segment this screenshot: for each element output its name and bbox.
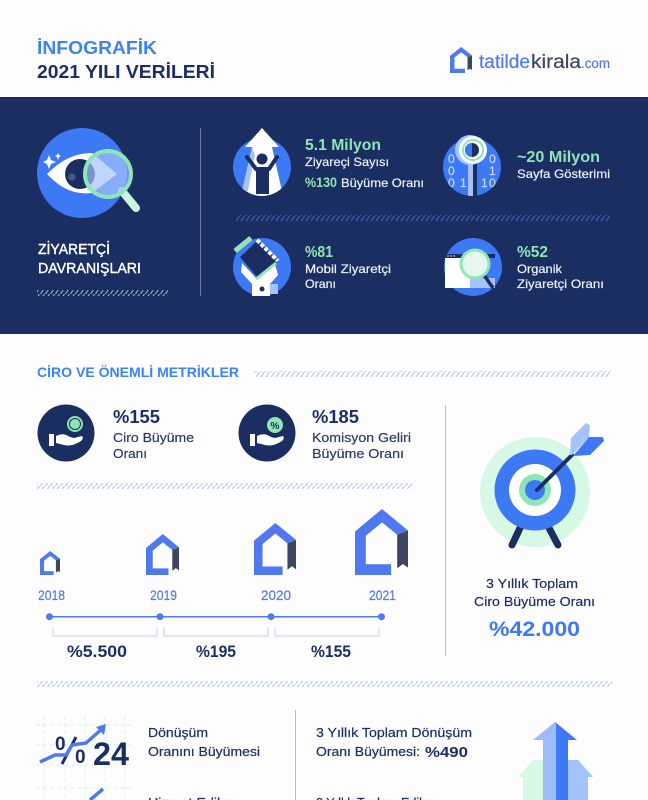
logo: tatildekirala.com [450, 47, 610, 73]
icon: binary keyhole: 0 [448, 164, 455, 178]
icon: house 2020 [254, 523, 296, 575]
icon: commission hand percent [238, 404, 296, 462]
icon: conversion rate chart: 0 [55, 734, 66, 755]
text: commission growth: Büyüme Oranı [312, 446, 404, 461]
text: revenue growth: Oranı [113, 446, 147, 461]
icon: binary keyhole: 0 [448, 152, 455, 166]
text: organic visitors: Ziyaretçi Oranı [517, 277, 604, 291]
text: conversion rate growth: Oranını Büyümesi [148, 744, 260, 759]
year labels: 2018 [38, 588, 65, 603]
icon: eye with magnifier [37, 128, 136, 218]
icon: revenue hand coin [38, 404, 94, 462]
heading: title: İNFOGRAFİK [37, 38, 157, 58]
growth labels: %155 [311, 642, 351, 661]
text: mobile visitors: Oranı [305, 277, 336, 291]
panel: visitor behaviour [0, 97, 648, 334]
year labels: 2021 [369, 588, 396, 603]
icon: house 2021 [355, 509, 408, 575]
icon: binary keyhole: 0 [448, 176, 455, 190]
text: commission growth [312, 407, 411, 461]
text: visitor count: Büyüme Oranı [341, 176, 424, 190]
icon: binary keyhole [443, 135, 501, 198]
text: page views: Sayfa Gösterimi [517, 167, 610, 181]
text: conversion rate growth [148, 725, 260, 800]
text: page views: ~20 Milyon [517, 149, 600, 166]
heading: title [37, 38, 215, 82]
text: panel heading [38, 240, 141, 277]
year labels [38, 588, 396, 603]
text: total conversion growth: 3 Yıllık Toplam Dönüşüm [316, 725, 472, 740]
text: mobile visitors [305, 244, 391, 291]
year labels: 2020 [261, 588, 291, 603]
year labels: 2019 [150, 588, 177, 603]
text: commission growth: %185 [312, 407, 359, 427]
icon: growth arrows [518, 722, 593, 800]
icon: conversion rate chart [36, 716, 133, 800]
timeline axis [46, 613, 385, 620]
text: total conversion growth: %490 [425, 744, 468, 761]
text: commission growth: Komisyon Geliri [312, 430, 411, 445]
icon: visitors arrow [233, 128, 291, 200]
icon: commission hand percent: % [271, 421, 280, 432]
icon: conversion rate chart: 24 [93, 736, 129, 772]
icon: binary keyhole: 0 [489, 152, 496, 166]
growth labels: %5.500 [67, 642, 127, 661]
text: organic visitors: %52 [517, 244, 548, 261]
icon: target with arrow [480, 423, 604, 547]
text: panel heading: ZİYARETÇİ [38, 240, 110, 258]
text: mobile visitors: Mobil Ziyaretçi [305, 262, 391, 276]
icon: mobile phone in hand [233, 238, 291, 296]
text: visitor count: 5.1 Milyon [305, 137, 381, 154]
logo: tatildekirala.com: .com [581, 55, 610, 71]
text: visitor count: %130 [305, 175, 337, 190]
text: organic visitors: Organik [517, 262, 563, 276]
icon: browser with magnifier [444, 238, 502, 296]
text: revenue growth: %155 [113, 407, 160, 427]
heading: revenue section: CİRO VE ÖNEMLİ METRİKLER [37, 364, 239, 380]
text: conversion rate growth: Dönüşüm [148, 725, 208, 740]
icon: conversion rate chart: 0 [75, 747, 86, 768]
text: total conversion growth [316, 725, 472, 800]
text: revenue growth: Ciro Büyüme [113, 430, 194, 445]
logo: tatildekirala.com: kirala [531, 52, 581, 73]
text: page views [517, 149, 610, 181]
chart: yearly growth timeline [38, 509, 408, 661]
text: panel heading: DAVRANIŞLARI [38, 260, 141, 277]
icon: binary keyhole: 1 [489, 164, 496, 178]
icon: house 2019 [146, 534, 179, 575]
icon: binary keyhole: 0 [489, 176, 496, 190]
text: mobile visitors: %81 [305, 244, 333, 261]
text: total revenue growth: Ciro Büyüme Oranı [474, 594, 595, 609]
logo: tatildekirala.com: tatilde [479, 52, 530, 73]
text: total revenue growth [474, 576, 595, 641]
text: visitor count: Ziyareçi Sayısı [305, 155, 389, 169]
text: total conversion growth: Oranı Büyümesi: [316, 744, 420, 759]
text: total revenue growth: %42.000 [489, 618, 580, 641]
text: total revenue growth: 3 Yıllık Toplam [486, 576, 578, 591]
growth labels [67, 642, 351, 661]
text: visitor count [305, 137, 424, 190]
icon: binary keyhole: 1 [460, 176, 467, 190]
heading: title: 2021 YILI VERİLERİ [37, 62, 215, 82]
text: revenue growth [113, 407, 194, 461]
growth labels: %195 [196, 642, 236, 661]
text: organic visitors [517, 244, 604, 291]
icon: house 2018 [40, 551, 60, 575]
icon: binary keyhole: 1 [481, 176, 488, 190]
